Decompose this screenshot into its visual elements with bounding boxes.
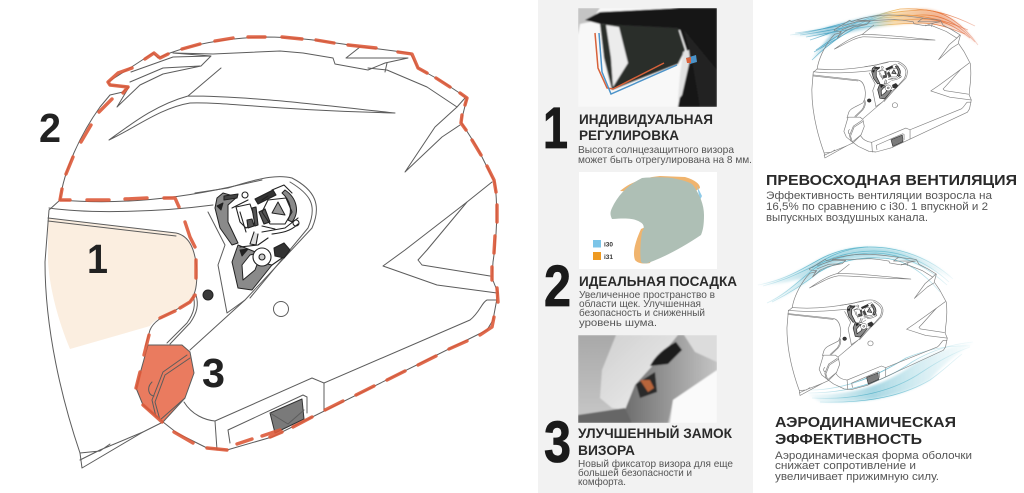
airflow ribbon top	[758, 247, 953, 303]
callout number 2: 2	[39, 105, 61, 151]
heading: perfect fit: ИДЕАЛЬНАЯ ПОСАДКА	[579, 274, 737, 289]
chart: shell comparison	[579, 172, 717, 269]
photo: visor adjustment	[578, 8, 717, 107]
airflow streaks	[790, 9, 978, 60]
text: aerodynamics: Аэродинамическая форма оболочки	[775, 450, 972, 462]
main helmet diagram	[45, 37, 498, 468]
chart: shell comparison: i30	[604, 242, 613, 248]
legend i30	[593, 240, 601, 248]
panel: features column	[538, 0, 753, 493]
text: aerodynamics: увеличивает прижимную силу.	[775, 471, 939, 483]
heading: aerodynamics: ЭФФЕКТИВНОСТЬ	[775, 432, 922, 448]
heading: individual adjustment: РЕГУЛИРОВКА	[579, 128, 679, 143]
text: perfect fit: уровень шума.	[579, 318, 657, 329]
airflow ribbon	[790, 9, 978, 60]
helmet line drawing	[787, 254, 947, 396]
number 1: 1	[543, 96, 568, 161]
text: ventilation: выпускных воздушных канала.	[766, 212, 928, 224]
red dashed outline	[60, 37, 498, 450]
heading: improved visor lock: УЛУЧШЕННЫЙ ЗАМОК	[578, 426, 733, 441]
text: improved visor lock: комфорта.	[578, 476, 626, 488]
visor highlight area 1	[48, 218, 196, 349]
number 3: 3	[544, 410, 571, 475]
aerodynamics helmet with airflow	[758, 247, 973, 402]
airflow streaks bottom	[808, 342, 973, 402]
text: individual adjustment: Высота солнцезащитного визора	[578, 145, 734, 156]
heading: individual adjustment: ИНДИВИДУАЛЬНАЯ	[579, 112, 713, 127]
text: ventilation: 16,5% по сравнению с i30. 1 впускной и 2	[766, 201, 988, 213]
callout number 1: 1	[87, 236, 108, 282]
text: improved visor lock: большей безопасности и	[578, 467, 692, 479]
text: perfect fit: области щек. Улучшенная	[579, 298, 701, 310]
airflow ribbon bottom	[808, 342, 973, 402]
panel background	[538, 0, 753, 493]
text: perfect fit: Увеличенное пространство в	[579, 290, 715, 301]
heading: ventilation: ПРЕВОСХОДНАЯ ВЕНТИЛЯЦИЯ	[766, 173, 1017, 189]
text: individual adjustment: может быть отрегулирована на 8 мм.	[578, 154, 752, 166]
heading: aerodynamics: АЭРОДИНАМИЧЕСКАЯ	[775, 415, 956, 431]
heading: improved visor lock: ВИЗОРА	[578, 443, 635, 458]
text: perfect fit: безопасность и сниженный	[579, 307, 705, 319]
photo: visor lock	[578, 335, 717, 423]
chart: shell comparison: i31	[604, 254, 613, 261]
airflow streaks top	[758, 247, 953, 303]
callout number 3: 3	[202, 350, 225, 396]
helmet line drawing	[45, 37, 498, 468]
text: aerodynamics: снижает сопротивление и	[775, 460, 916, 472]
legend i31	[593, 252, 601, 260]
ventilation helmet with heat airflow	[790, 9, 978, 158]
helmet line drawing	[812, 15, 971, 158]
number 2: 2	[544, 254, 571, 319]
text: ventilation: Эффективность вентиляции возросла на	[766, 190, 993, 202]
text: improved visor lock: Новый фиксатор визора для еще	[578, 458, 733, 470]
